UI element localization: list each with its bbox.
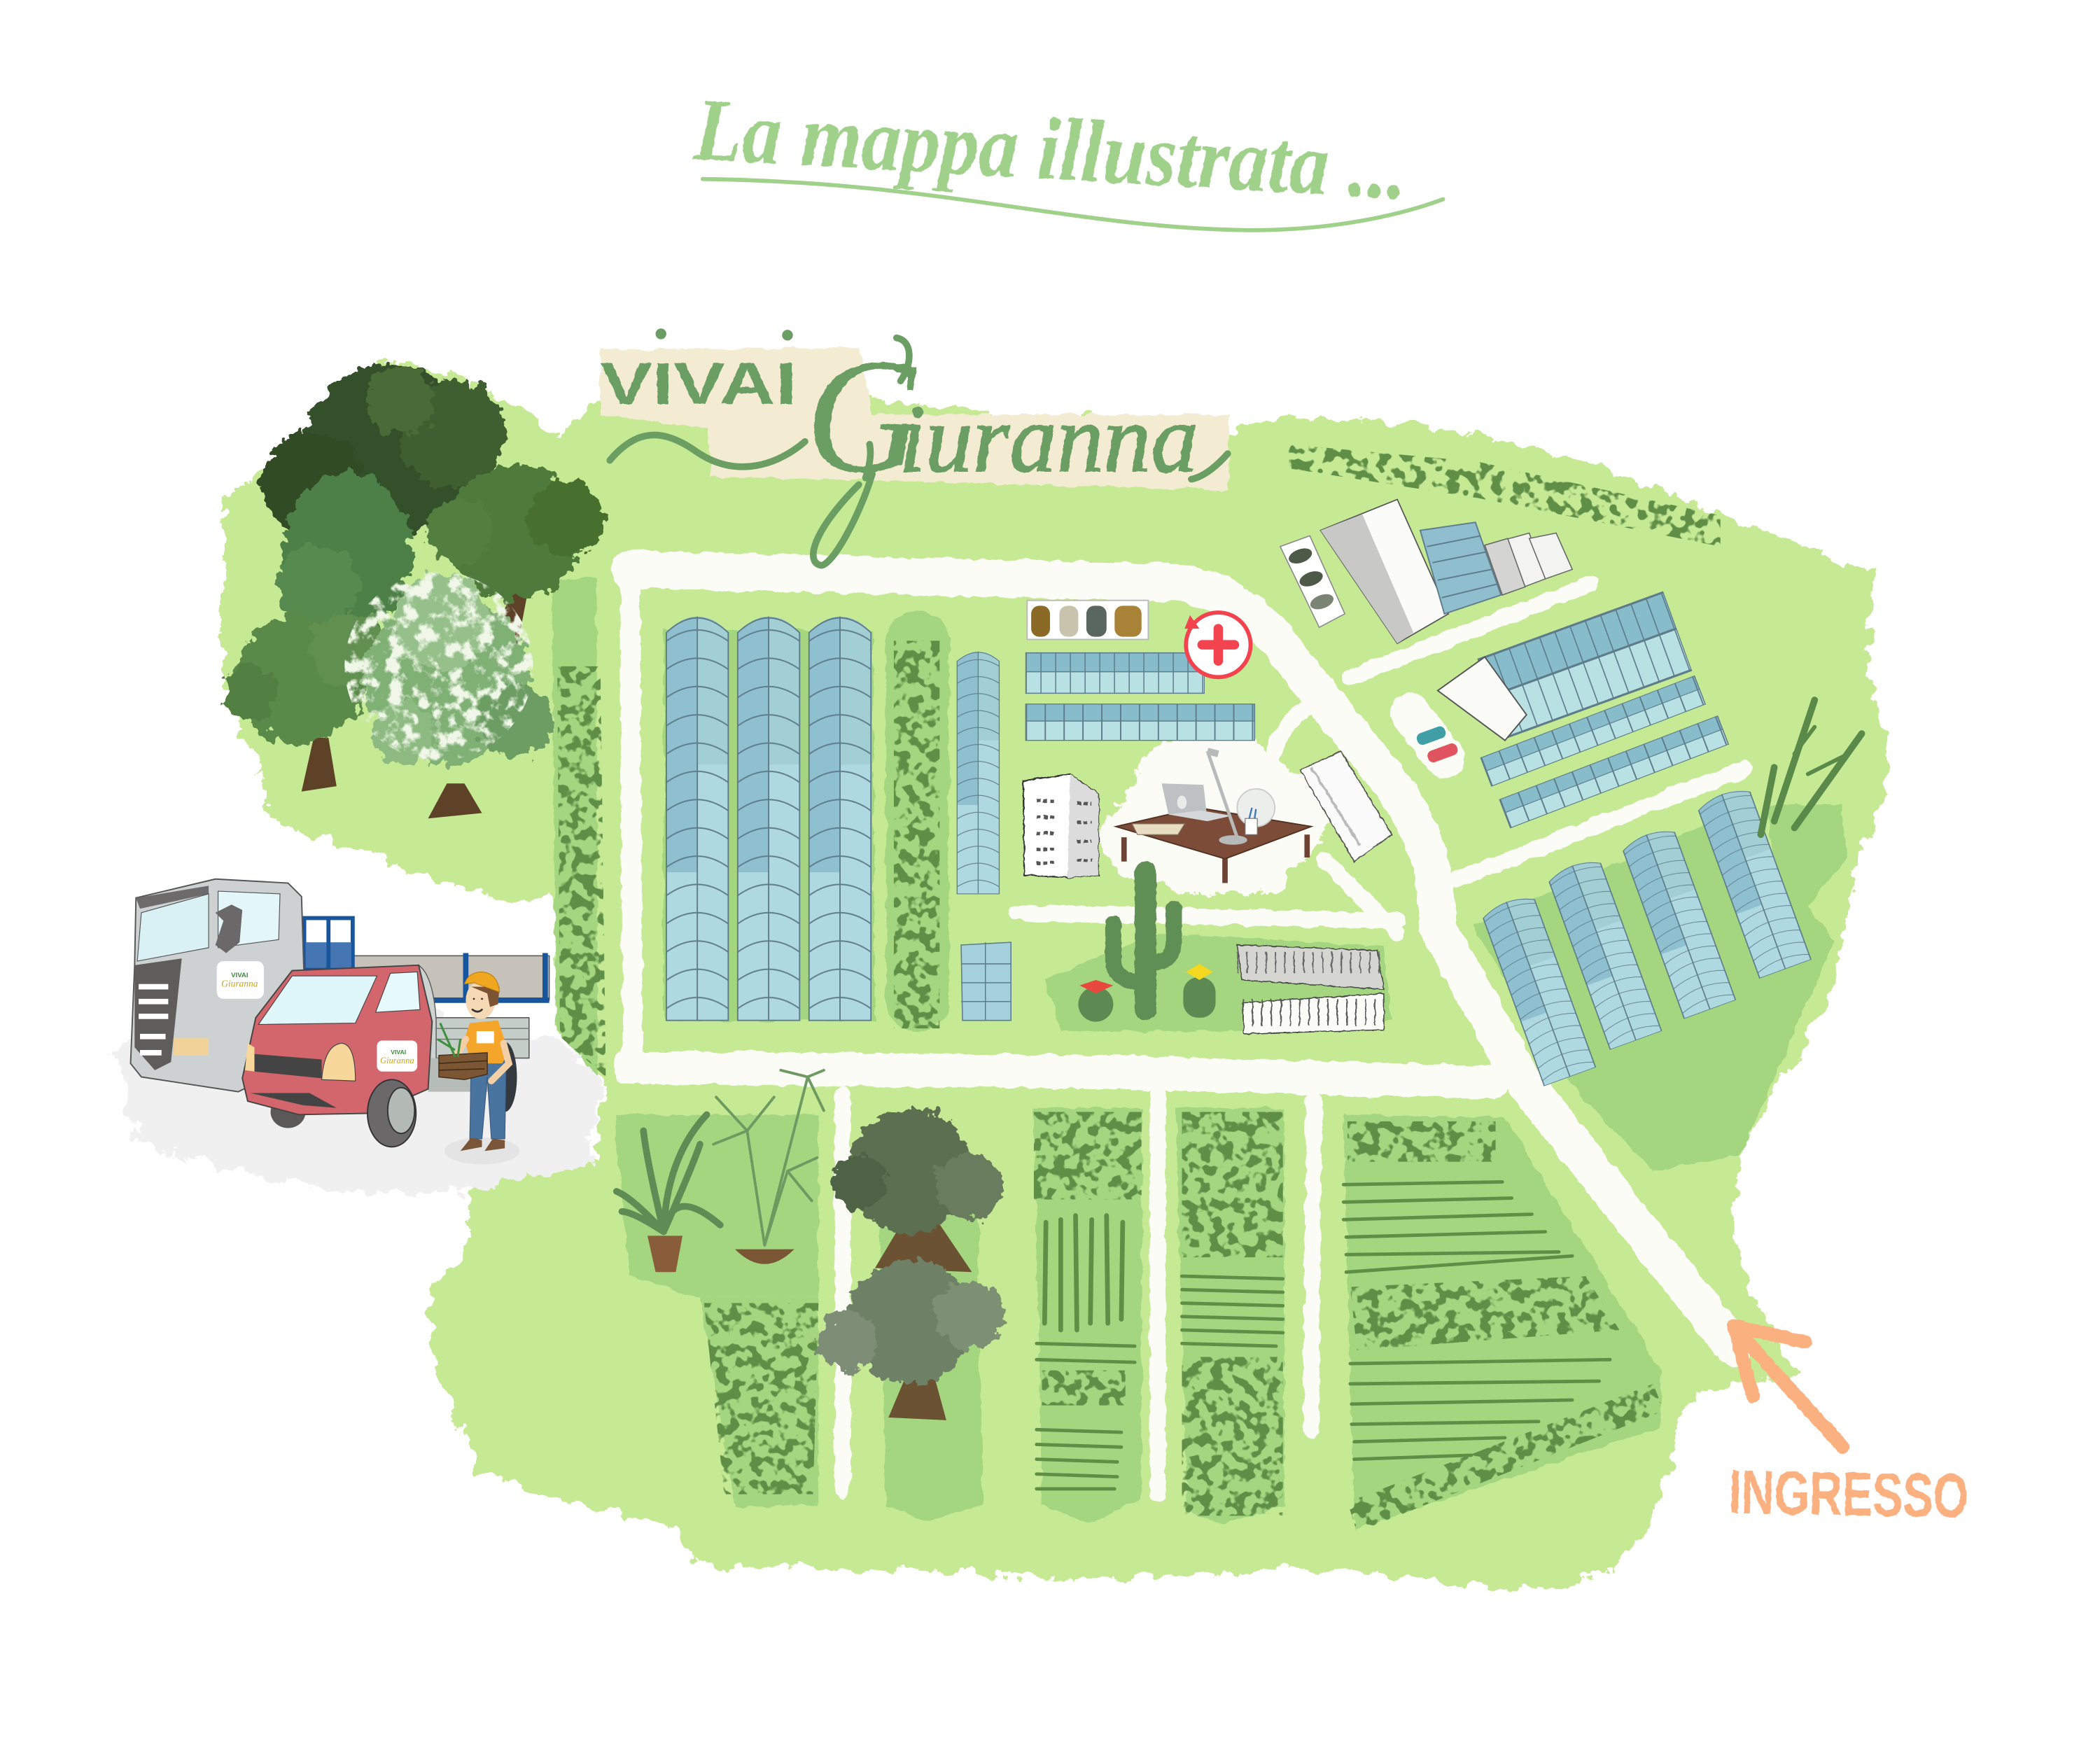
- head: [465, 981, 496, 1019]
- roads: [630, 569, 1744, 1494]
- plant: [438, 1023, 461, 1057]
- van logo: VIVAI: [391, 1049, 406, 1056]
- entrance label: INGRESSO: [1728, 1457, 1969, 1531]
- face: [472, 999, 482, 1011]
- rear wheel: [493, 1042, 517, 1112]
- crop beds: [704, 1112, 1664, 1532]
- van logo: [377, 1041, 417, 1072]
- long greenhouses: [1480, 676, 1705, 786]
- cactus garden: [1078, 872, 1384, 1034]
- hard hat: [464, 972, 499, 992]
- office white cloud: [1100, 731, 1326, 895]
- wheel: [368, 1079, 416, 1147]
- shadow: [444, 1138, 519, 1164]
- olive trees: [818, 1110, 1004, 1420]
- visor: [136, 886, 209, 909]
- truck bed: [353, 953, 550, 1003]
- truck logo: [217, 961, 264, 999]
- main road: [630, 569, 1734, 1348]
- bumper vent: [251, 1093, 337, 1108]
- horizontal rows column 2: [1182, 1276, 1283, 1346]
- cab: [131, 879, 304, 1092]
- tree: right: [427, 464, 603, 649]
- pants: [470, 1060, 506, 1139]
- laptop: [1162, 783, 1232, 821]
- olive upper: [832, 1110, 1003, 1272]
- logo: Vivai Giuranna: [601, 325, 1228, 566]
- flourish: [610, 338, 1228, 566]
- greenhouses: horizontal: [1026, 653, 1254, 741]
- small cactus yellow: [1183, 964, 1216, 1018]
- entrance arrow: [1734, 1326, 1843, 1447]
- cabin back: [419, 965, 436, 1077]
- small cactus red: [1078, 980, 1113, 1022]
- small greenhouse block: [961, 942, 1011, 1021]
- seed bins: [1027, 601, 1148, 639]
- first aid icon: [1184, 612, 1251, 677]
- right greenhouses: [1438, 592, 1811, 1086]
- horizontal rows column 1: [1037, 1343, 1135, 1489]
- side window: [218, 891, 280, 948]
- load bed: [433, 1018, 529, 1058]
- vertical crop rows: [1044, 1216, 1123, 1330]
- worker: [438, 972, 519, 1164]
- tree: pale: [344, 572, 552, 818]
- lamp: [1208, 751, 1247, 844]
- white seedbeds: [1237, 945, 1384, 1034]
- branch roads: [843, 584, 1744, 1494]
- shoes: [461, 1138, 505, 1151]
- bin panel: [1280, 536, 1345, 627]
- vertical small greenhouse: [957, 652, 999, 894]
- grille: [254, 1054, 322, 1078]
- parking: [1410, 713, 1444, 758]
- map ground: [222, 359, 1894, 1592]
- van logo: Giuranna: [380, 1056, 414, 1065]
- mirror: [216, 904, 242, 953]
- Giuranna: G: [805, 325, 923, 507]
- truck logo: Giuranna: [221, 979, 258, 989]
- olive lower: [818, 1260, 1004, 1420]
- potted palms: [617, 1070, 824, 1272]
- top right buildings: [1280, 499, 1572, 643]
- grille: [134, 958, 182, 1070]
- warehouse: [1321, 499, 1448, 643]
- body: [242, 965, 432, 1114]
- front wheel left: [271, 1096, 306, 1128]
- Giuranna: [805, 325, 1198, 507]
- top right hedge: [1287, 444, 1721, 547]
- tree: middle: [277, 471, 412, 633]
- side window: [376, 972, 420, 1012]
- VIVAI: VIVAI: [601, 350, 797, 416]
- trees: [223, 365, 603, 818]
- office building: [1023, 774, 1098, 878]
- bottom road: [630, 1068, 1492, 1082]
- title underline: [703, 179, 1443, 230]
- gray truck: [131, 879, 550, 1092]
- big cactus: [1113, 872, 1174, 1009]
- vehicles yard: [113, 996, 601, 1193]
- windshield: [258, 976, 377, 1024]
- headlights: [322, 1043, 356, 1081]
- hedge in central strip: [894, 640, 939, 1028]
- palm left: [617, 1114, 720, 1272]
- tree: dark: [261, 365, 505, 537]
- chassis: [428, 1058, 512, 1092]
- blue frame: [304, 918, 353, 968]
- palm right: [713, 1070, 824, 1264]
- angled greenhouse: [1420, 522, 1501, 614]
- horizontal rows large field: [1343, 1182, 1610, 1460]
- desk top: [1116, 808, 1311, 859]
- pen cup: [1245, 808, 1257, 834]
- white building near road: [1301, 751, 1392, 862]
- left hedge: [557, 666, 606, 1077]
- plate: [1237, 789, 1275, 827]
- white section: [1438, 657, 1527, 741]
- windshield: [137, 894, 209, 961]
- darker green zones: [552, 579, 1848, 1530]
- shirt: [464, 1021, 509, 1063]
- desk: [1116, 751, 1311, 883]
- tunnels: [1480, 892, 1595, 1086]
- shirt badge: [477, 1031, 494, 1043]
- title: [692, 80, 1443, 230]
- desk legs: [1124, 834, 1307, 883]
- blotch crops: [704, 1112, 1664, 1532]
- headlight: [174, 1038, 209, 1056]
- red truck: [242, 965, 529, 1147]
- arms: [452, 1040, 509, 1081]
- Giuranna: iuranna: [899, 385, 1198, 492]
- truck logo: VIVAI: [231, 972, 248, 979]
- left road: [630, 576, 633, 1074]
- hair: [471, 987, 499, 1007]
- small sheds: [1485, 533, 1572, 595]
- beige logo background: [601, 347, 1229, 490]
- bamboo: [1760, 700, 1862, 834]
- greenhouses: left block: [666, 617, 999, 1021]
- crate: [439, 1053, 487, 1079]
- title text: La mappa illustrata ...: [692, 80, 1410, 218]
- parked cars: [1415, 725, 1460, 764]
- book: [1132, 824, 1184, 834]
- big greenhouse: [1478, 592, 1691, 737]
- tree: left: [223, 611, 385, 792]
